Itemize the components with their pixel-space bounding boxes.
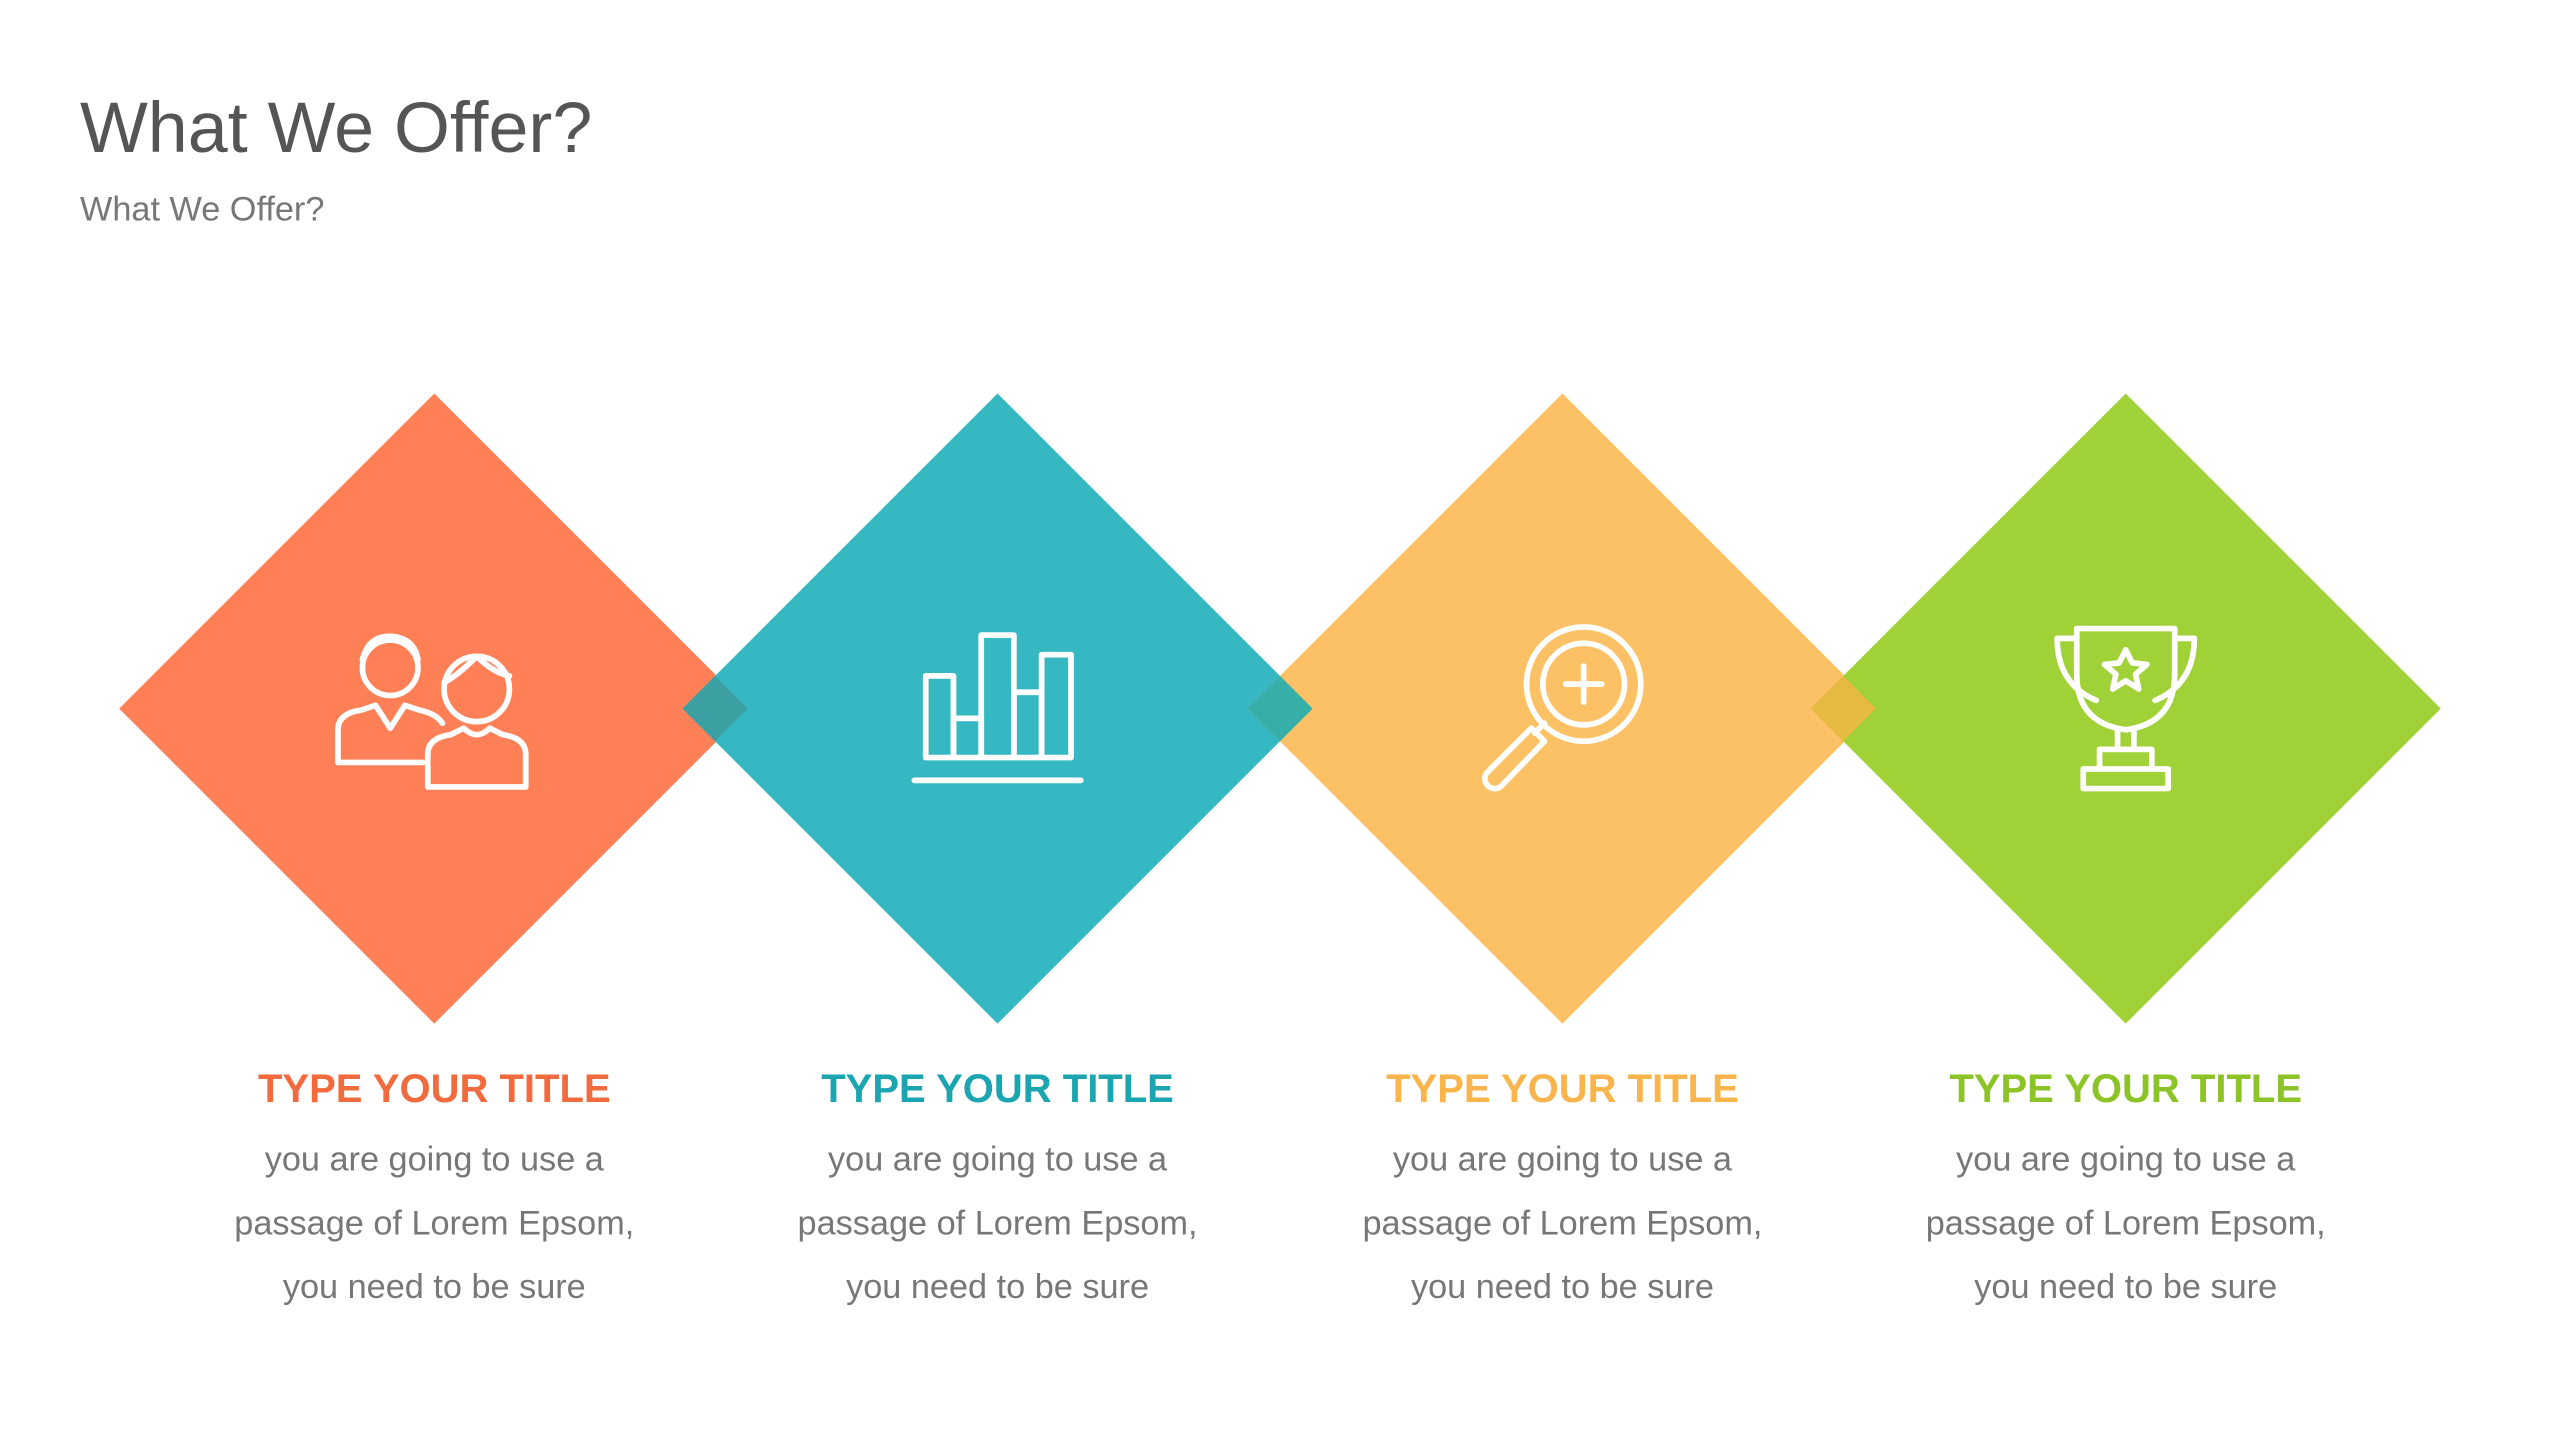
panel: diamond 3 [1247, 393, 1878, 1024]
icon: people [338, 636, 526, 787]
title: What We Offer? [80, 88, 592, 168]
icon: bar chart [914, 635, 1081, 780]
text block 3: you need to be sure [1411, 1268, 1714, 1306]
panel: diamond 4 [1811, 393, 2441, 1024]
text block 2 [798, 1067, 1198, 1306]
text block 2: passage of Lorem Epsom, [798, 1204, 1198, 1242]
text block 3: TYPE YOUR TITLE [1386, 1067, 1739, 1111]
panel: diamond 2 [682, 393, 1313, 1024]
text block 3: you are going to use a [1393, 1141, 1733, 1179]
text block 4: TYPE YOUR TITLE [1949, 1067, 2302, 1111]
text block 1: TYPE YOUR TITLE [258, 1067, 611, 1111]
text block 1: passage of Lorem Epsom, [234, 1204, 634, 1242]
icon: trophy [2057, 629, 2194, 789]
overlap diamonds [682, 676, 1876, 741]
text block 2: you need to be sure [846, 1268, 1149, 1306]
text block 1 [234, 1067, 634, 1306]
text block 1: you are going to use a [265, 1141, 605, 1179]
text block 4: you need to be sure [1974, 1268, 2277, 1306]
text block 1: you need to be sure [283, 1268, 586, 1306]
text block 4: you are going to use a [1956, 1141, 2296, 1179]
text block 4: passage of Lorem Epsom, [1926, 1204, 2326, 1242]
subtitle: What We Offer? [80, 190, 324, 228]
text block 4 [1926, 1067, 2326, 1306]
icon: magnifier [1485, 627, 1641, 789]
text block 3: passage of Lorem Epsom, [1362, 1204, 1762, 1242]
panel: diamond 1 [119, 393, 749, 1024]
text block 2: you are going to use a [828, 1141, 1168, 1179]
text block 2: TYPE YOUR TITLE [821, 1067, 1174, 1111]
text block 3 [1362, 1067, 1762, 1306]
